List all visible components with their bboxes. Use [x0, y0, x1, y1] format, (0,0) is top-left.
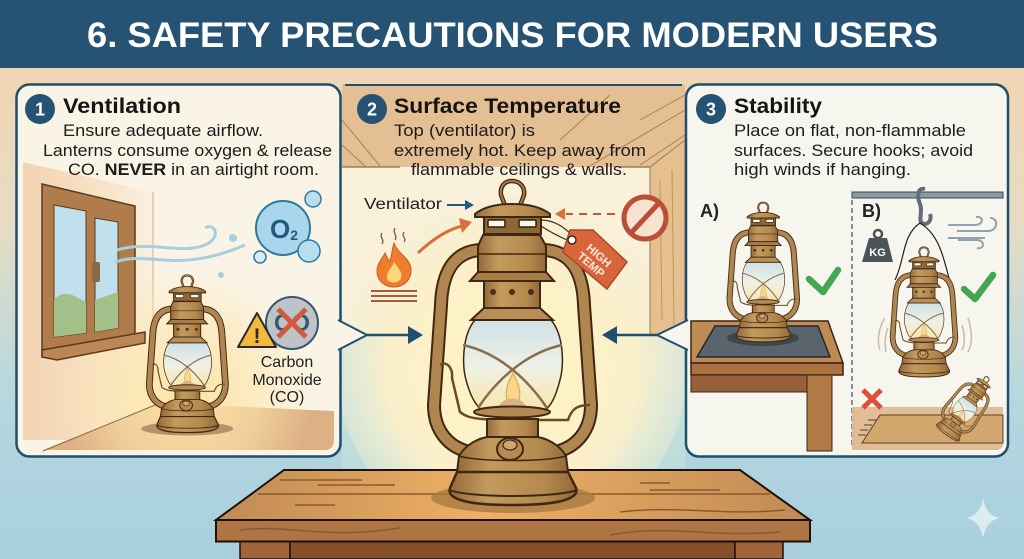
label: option A: A) — [700, 201, 719, 221]
text: stability body — [734, 121, 973, 179]
text: surface temperature body — [394, 121, 646, 179]
text: ventilation body — [43, 121, 332, 179]
icon: carbon monoxide warning — [238, 297, 318, 349]
icon: check A — [809, 270, 838, 292]
badge 3 — [696, 94, 726, 124]
heading: surface temperature: Surface Temperature — [394, 95, 621, 118]
lantern: ventilation — [141, 275, 233, 435]
icon: heat flame — [371, 228, 417, 301]
icon: sparkle — [966, 498, 1000, 538]
text: surface temperature — [357, 94, 646, 179]
label: carbon monoxide — [252, 354, 322, 406]
heading: stability: Stability — [734, 95, 822, 118]
title bar — [0, 0, 1024, 68]
arrow: ventilation panel to lantern — [338, 320, 423, 350]
icon: carbon monoxide warning: ! — [254, 325, 260, 348]
icon: kg weight — [862, 230, 893, 262]
badge 2: 2 — [367, 100, 377, 120]
text: surface temperature body: extremely hot. Keep away from — [394, 141, 646, 160]
label: carbon monoxide: (CO) — [270, 389, 304, 406]
text: stability body: high winds if hanging. — [734, 160, 911, 179]
panel: centre scene, surface temperature backdrop — [337, 84, 687, 545]
icon: oxygen bubbles: 2 — [290, 227, 298, 243]
arrow: dashed warning — [555, 208, 615, 220]
text: ventilation body: CO. NEVER in an airtight room. — [68, 160, 319, 179]
title: 6. SAFETY PRECAUTIONS FOR MODERN USERS — [87, 16, 938, 55]
text: ventilation body: Ensure adequate airflow. — [63, 121, 263, 140]
lantern A — [730, 203, 797, 342]
badge 2 — [357, 94, 387, 124]
icon: open window — [42, 184, 145, 360]
icon: wind — [948, 217, 996, 248]
icon: prohibition sign — [624, 197, 666, 239]
text: surface temperature body: flammable ceilings & walls. — [411, 160, 627, 179]
icon: kg weight: KG — [869, 247, 886, 259]
panel: stability — [686, 84, 1008, 456]
floor and rug — [852, 407, 1003, 450]
arrow: stability panel to lantern — [602, 320, 688, 350]
text: ventilation body: Lanterns consume oxygen & release — [43, 141, 332, 160]
icon: oxygen bubbles: O — [270, 214, 290, 244]
badge 1: 1 — [35, 100, 45, 120]
icon: check B — [964, 275, 993, 299]
lantern B — [893, 247, 955, 377]
tag: high temp: HIGH — [583, 242, 613, 270]
ventilator label and arrow — [364, 196, 474, 213]
tag: high temp — [541, 220, 627, 289]
divider and rail — [852, 192, 1003, 447]
heading: ventilation: Ventilation — [63, 95, 181, 118]
icon: oxygen bubbles — [254, 191, 321, 263]
badge 3: 3 — [706, 100, 716, 120]
icon: airflow — [115, 227, 245, 276]
icon: red cross — [863, 390, 881, 408]
text: stability body: surfaces. Secure hooks; avoid — [734, 141, 973, 160]
centre lantern — [434, 181, 591, 505]
table — [216, 470, 810, 559]
text: surface temperature body: Top (ventilator) is — [394, 121, 535, 140]
arrow: heat rising — [418, 218, 472, 253]
ventilator label and arrow: Ventilator — [364, 196, 442, 213]
fallen lantern — [932, 367, 1002, 445]
table with slate — [691, 321, 843, 451]
tag: high temp: TEMP — [574, 250, 607, 281]
badge 1 — [25, 94, 55, 124]
panel: ventilation — [16, 84, 340, 456]
sway marks — [878, 318, 971, 352]
label: option B: B) — [862, 201, 881, 221]
text: stability body: Place on flat, non-flammable — [734, 121, 966, 140]
label: carbon monoxide: Carbon — [261, 354, 313, 371]
icon: carbon monoxide warning: CO — [274, 310, 310, 337]
icon: S-hook and wire — [895, 189, 950, 282]
label: carbon monoxide: Monoxide — [252, 372, 322, 389]
